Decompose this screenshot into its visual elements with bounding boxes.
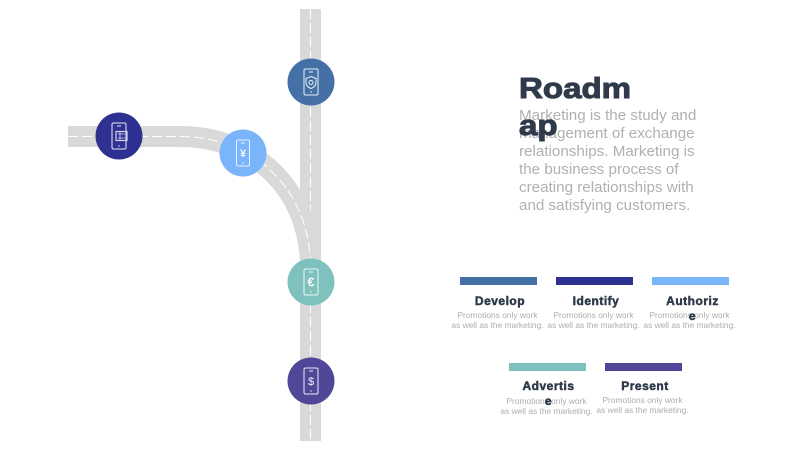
title: ap [519,110,558,142]
item: Develop: as well as the marketing. [451,320,544,330]
description text: relationships. Marketing is [519,143,695,160]
item: Present: as well as the marketing. [596,405,689,415]
marker: shield phone [288,58,334,106]
description text: Marketing is the study and [519,107,696,124]
item: Present [596,363,689,415]
marker: euro phone: € [308,276,315,290]
description text [519,107,696,214]
item: Develop: Develop [475,294,525,308]
item: Develop: Promotions only work [457,310,538,320]
item: Present: Present [621,379,669,393]
marker: dollar phone [288,358,334,404]
description text: and satisfying customers. [519,197,690,214]
title: Roadm [519,73,631,105]
item: Develop [451,277,544,330]
item: Authorize: Authoriz [666,294,719,308]
item: Advertise: as well as the marketing. [500,406,593,416]
item: Identify: as well as the marketing. [547,320,640,330]
title [519,73,631,142]
item: Authorize: e [689,309,696,323]
description text: management of exchange [519,125,695,142]
description text: creating relationships with [519,179,694,196]
marker: euro phone [288,258,334,306]
marker: yen phone [220,130,266,176]
item: Advertise [500,363,593,416]
item: Authorize: Promotions only work [649,310,730,320]
item: Advertise: e [545,394,552,408]
description text: the business process of [519,161,679,178]
item: Authorize: as well as the marketing. [643,320,736,330]
item: Advertise: Advertis [522,379,575,393]
road: vertical [300,9,321,441]
item: Identify: Promotions only work [553,310,634,320]
item: Identify: Identify [573,294,619,308]
marker: yen phone: ¥ [240,148,247,160]
item: Identify [547,277,640,330]
item: Present: Promotions only work [602,395,683,405]
marker: dollar phone: $ [308,376,314,388]
item: Advertise: Promotions only work [506,396,587,406]
marker: SIM phone [96,112,142,160]
item: Authorize [643,277,736,330]
road: curved branch [68,136,310,268]
